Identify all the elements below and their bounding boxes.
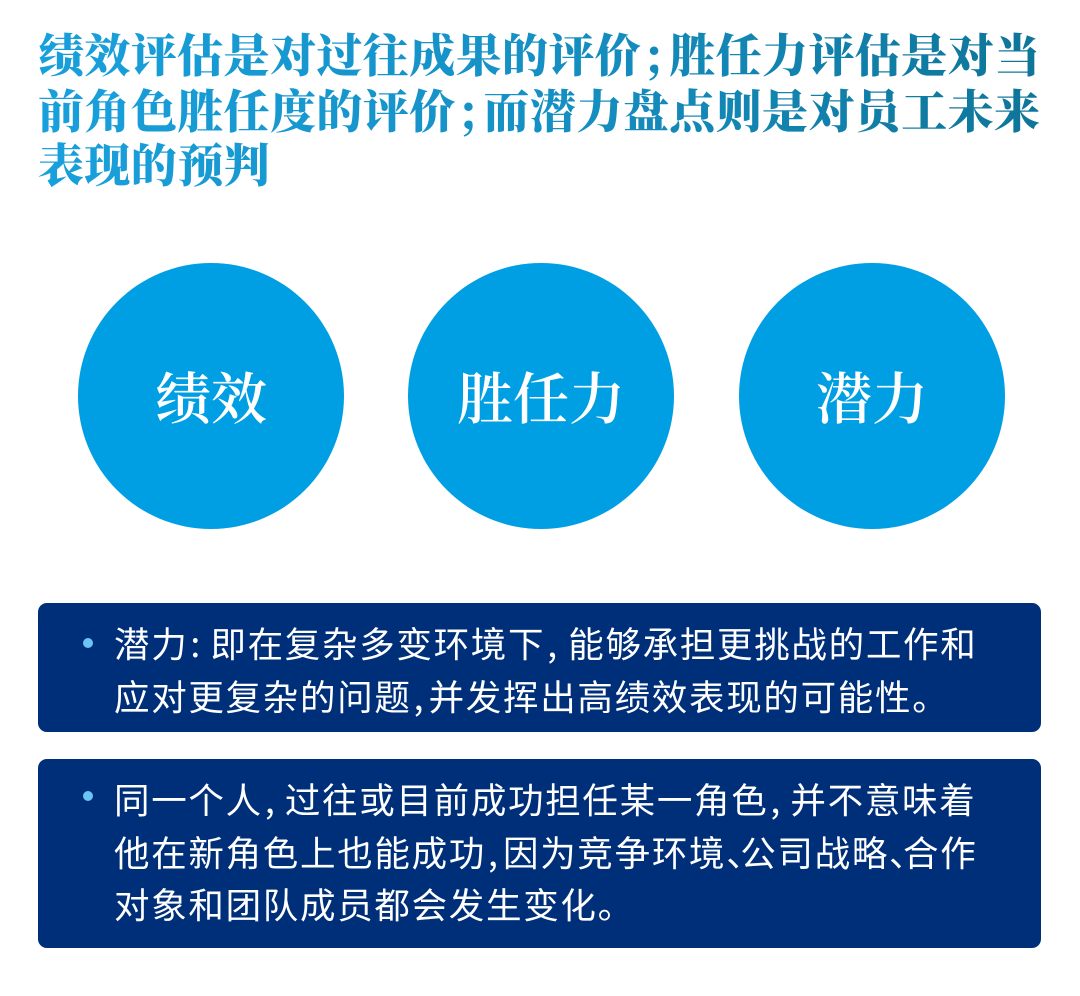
bullet xyxy=(83,638,93,648)
title xyxy=(38,20,1040,196)
title: 表现的预判 xyxy=(38,130,270,196)
title: 绩效评估是对过往成果的评价;胜任力评估是对当 xyxy=(38,20,1040,86)
circle: 绩效 xyxy=(78,263,344,529)
text: potential definition xyxy=(114,617,977,720)
text: same person in new role xyxy=(114,773,977,929)
panel: potential definition xyxy=(38,603,1041,732)
text: potential definition: , xyxy=(414,670,423,720)
circle: 胜任力 xyxy=(408,263,674,529)
text: same person in new role: 、 xyxy=(889,826,925,876)
circle: 胜任力: 胜任力 xyxy=(457,356,625,436)
text: same person in new role: , xyxy=(488,826,498,876)
text: same person in new role: , xyxy=(770,773,780,824)
text: same person in new role: , xyxy=(265,773,275,824)
text: same person in new role: 同一个人 过往或目前成功担任某一角色 并不意味着 xyxy=(114,773,976,824)
circle: 绩效: 绩效 xyxy=(155,356,267,436)
text: potential definition: : xyxy=(190,617,200,668)
text: potential definition: 应对更复杂的问题 并发挥出高绩效表现的可能性。 xyxy=(114,670,949,720)
title: 前角色胜任度的评价;而潜力盘点则是对员工未来 xyxy=(38,76,1040,142)
circle: 潜力 xyxy=(739,263,1005,529)
text: same person in new role: 、 xyxy=(726,826,762,876)
text: same person in new role: 对象和团队成员都会发生变化。 xyxy=(114,878,635,929)
bullet xyxy=(83,791,93,801)
panel: same person in new role xyxy=(38,759,1041,948)
text: potential definition: , xyxy=(547,617,557,668)
text: same person in new role: 他在新角色上也能成功 因为竞争环境 公司战略 合作 xyxy=(114,826,977,876)
text: potential definition: 潜力 即在复杂多变环境下 能够承担更挑战的工作和 xyxy=(114,617,977,668)
circle: 潜力: 潜力 xyxy=(816,356,928,436)
